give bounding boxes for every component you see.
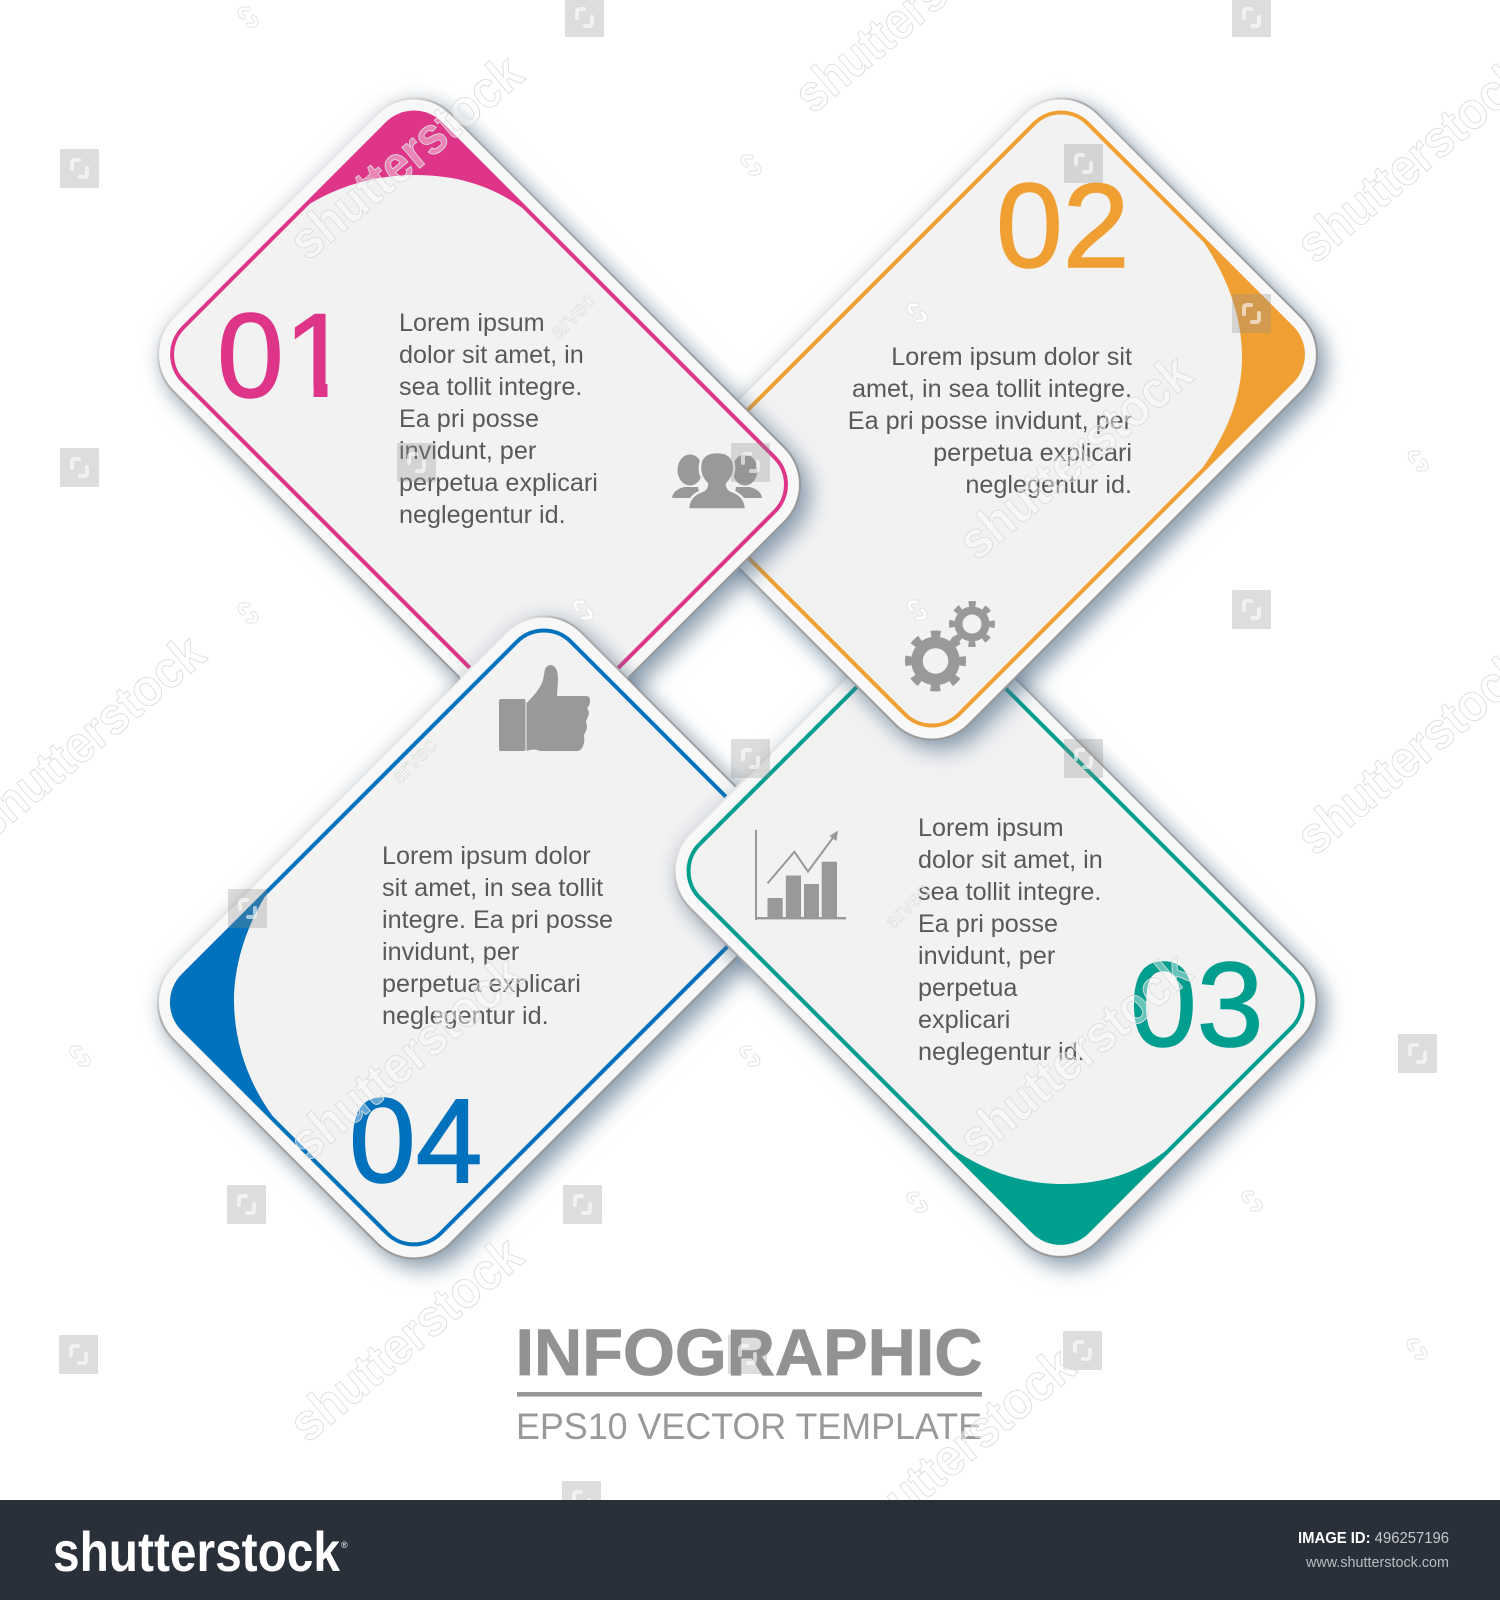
card 04 number: 04 [349, 1074, 482, 1208]
card 03 text: invidunt, per [918, 942, 1055, 970]
watermark: shutterstock text: shutterstock [278, 1226, 534, 1453]
card 03 frame [653, 593, 1338, 1278]
panel: card 01 (pink) [148, 90, 824, 697]
card 01 accent corner [309, 114, 524, 209]
card 03 text: Ea pri posse [918, 910, 1058, 938]
watermark: shutterstock text: arvec [879, 878, 935, 934]
card 01 text: dolor sit amet, in [399, 341, 584, 369]
card 01 border [156, 97, 802, 742]
card 04 text: integre. Ea pri posse [382, 906, 613, 934]
watermark: shutterstock text: shutterstock [830, 1337, 1086, 1564]
card 02 text: Lorem ipsum dolor sit [891, 343, 1132, 371]
card 03 text: dolor sit amet, in [918, 846, 1103, 874]
card 04 accent corner [174, 896, 274, 1117]
card 03 text: explicari [918, 1006, 1010, 1034]
card 03 number: 03 [1130, 938, 1263, 1072]
image id: IMAGE ID: 496257196 [1298, 1530, 1449, 1547]
card 04 text: invidunt, per [382, 938, 519, 966]
card 03 border [673, 613, 1318, 1259]
card 01 number [220, 312, 328, 399]
footer bar [0, 1500, 1500, 1600]
card 01 number: 0 [217, 289, 284, 423]
card 01 text: neglegentur id. [399, 501, 566, 529]
card 04 top corner [448, 608, 656, 765]
card 01 number: 1 [284, 289, 351, 423]
subtitle: EPS10 vector template: EPS10 VECTOR TEMPLATE [516, 1406, 982, 1447]
website: www.shutterstock.com [1305, 1555, 1449, 1571]
title: INFOGRAPHIC: INFOGRAPHIC [516, 1315, 982, 1389]
watermark: shutterstock text: shutterstock [278, 945, 534, 1172]
title rule [517, 1392, 982, 1397]
card 04 text: sit amet, in sea tollit [382, 874, 603, 902]
panel: card 04 top overlap over card 01 [448, 608, 656, 765]
icon: thumbs up [499, 665, 590, 751]
icon: bar chart with arrow [755, 830, 846, 920]
card 01 text: sea tollit integre. [399, 373, 582, 401]
card 01 text: Lorem ipsum [399, 309, 545, 337]
card 04 text: Lorem ipsum dolor [382, 842, 591, 870]
registered mark: ® [341, 1540, 348, 1550]
card 03 face [673, 613, 1318, 1259]
watermark: shutterstock text: arvec [386, 733, 442, 789]
card 02 border [674, 97, 1319, 741]
panel: card 02 (orange) [731, 90, 1340, 764]
card 04 text: neglegentur id. [382, 1002, 549, 1030]
icon: gears [908, 604, 992, 688]
card 03 accent corner [954, 1149, 1166, 1241]
card 01 text: perpetua explicari [399, 469, 598, 497]
card 02 accent corner [1202, 242, 1301, 468]
card 02 text: Ea pri posse invidunt, per [848, 407, 1132, 435]
footer logo: shutterstock [53, 1520, 341, 1583]
watermark: small marks [72, 9, 1426, 1357]
card 02 frame [654, 77, 1338, 761]
card 03 text: sea tollit integre. [918, 878, 1101, 906]
card 01 text: invidunt, per [399, 437, 536, 465]
panel: card 04 (blue) [148, 672, 756, 1283]
card 03 text: Lorem ipsum [918, 814, 1064, 842]
card 01 frame [137, 77, 822, 762]
panel: card 03 (teal) [665, 672, 1340, 1282]
card 04 face [156, 615, 802, 1260]
card 04 frame [136, 595, 821, 1280]
card 02 text: amet, in sea tollit integre. [852, 375, 1132, 403]
card 01 text: Ea pri posse [399, 405, 539, 433]
card 02 face [674, 97, 1319, 741]
card 02 text: perpetua explicari [933, 439, 1132, 467]
card 03 text: neglegentur id. [918, 1038, 1085, 1066]
watermark: shutterstock text: shutterstock [947, 344, 1203, 571]
watermark: shutterstock text: arvec [544, 288, 600, 344]
card 04 text: perpetua explicari [382, 970, 581, 998]
watermark: shutterstock text: shutterstock [278, 44, 534, 271]
card 01 face [156, 97, 802, 742]
icon: people group [672, 452, 762, 510]
watermark: shutterstock text: shutterstock [947, 942, 1203, 1169]
card 02 number: 02 [996, 159, 1129, 293]
card 03 text: perpetua [918, 974, 1018, 1002]
card 02 text: neglegentur id. [965, 471, 1132, 499]
card 04 border [156, 615, 802, 1260]
